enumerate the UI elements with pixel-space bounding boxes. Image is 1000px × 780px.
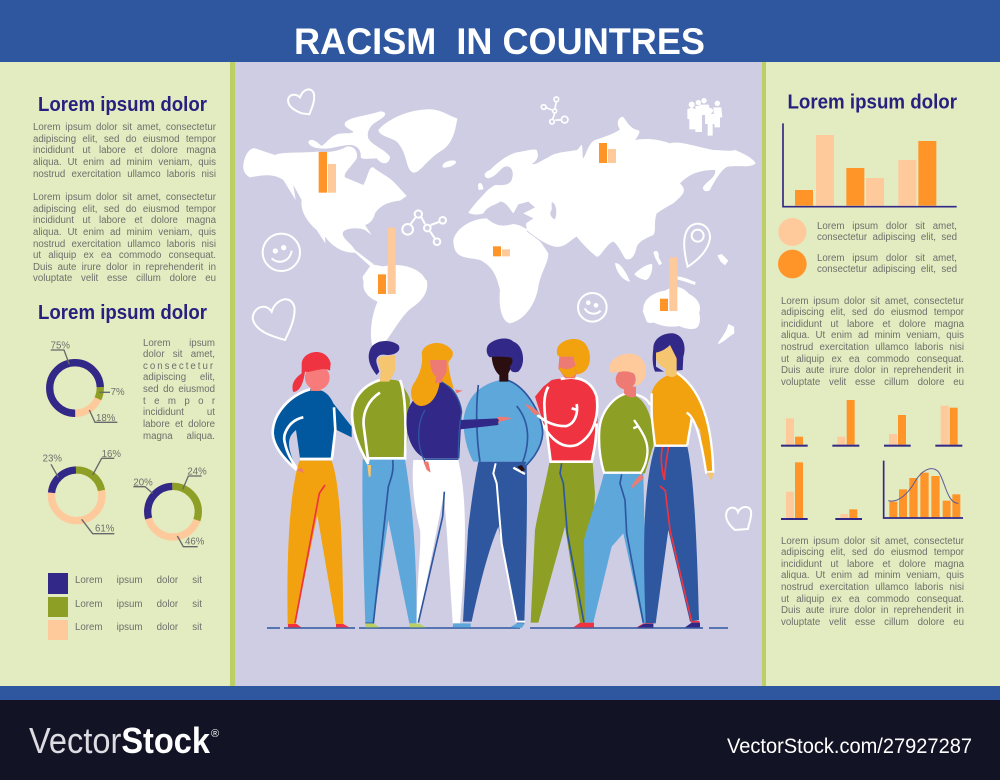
text block: right paragraph two [781,536,964,628]
icon: network top [541,97,568,124]
text block: beside donut: labore et dolore [143,419,215,430]
text block: right paragraph two: Lorem ipsum dolor sit amet, consectetur [781,536,964,546]
text block: left paragraph two: Duis aute irure dolor in reprehenderit in [33,262,216,273]
icon: smiley left [263,234,300,271]
bars: australia [660,257,677,311]
text block: left paragraph two: aliqua. Ut enim ad minim veniam, quis [33,227,216,238]
text block: right paragraph two: aliqua. Ut enim ad minim veniam, quis [781,570,964,581]
eurasia [468,117,756,259]
donut leader lines and percentages: 24% [187,466,207,477]
person four: blue sweater, dark skin [463,339,543,628]
text block: bar legend two: Lorem ipsum dolor sit amet, [817,252,957,264]
watermark footer [0,700,1000,780]
text block: right paragraph one: voluptate velit esse cillum dolore eu [781,377,964,388]
world map and decorative icons [243,89,756,348]
donut leader lines and percentages: 20% [133,477,153,488]
africa [453,218,548,323]
person three: blonde hair, navy top, white trousers [406,343,501,627]
text block: right paragraph one: incididunt ut labore et dolore magna [781,319,964,330]
heading: left top: Lorem ipsum dolor [38,93,207,116]
small bar charts [781,400,963,520]
text block: right paragraph one [781,296,964,388]
text block: left paragraph one: aliqua. Ut enim ad minim veniam, quis [33,157,216,168]
mini chart four [935,406,962,447]
text block: left paragraph two: voluptate velit esse cillum dolore eu [33,273,216,284]
text block: bar legend one: Lorem ipsum dolor sit amet, [817,220,957,232]
bars: south america [378,228,396,294]
bars: africa [493,246,510,256]
pacific islet [717,254,728,265]
person two: olive sweater, blue jeans [352,341,426,627]
text block: left paragraph two: incididunt ut labore et dolore magna [33,215,216,226]
registered mark: ® [211,728,219,740]
heading: left second: Lorem ipsum dolor [38,301,207,324]
text block: right paragraph two: incididunt ut labore et dolore magna [781,559,964,570]
panel: left sidebar [0,62,235,686]
donut leader lines and percentages: 23% [43,454,62,465]
donut leader lines and percentages: 75% [51,340,70,351]
borneo [634,264,652,280]
text block: right paragraph one: Duis aute irure dolor in reprehenderit in [781,365,964,376]
panel: right sidebar [762,62,1000,686]
donut charts [43,340,207,548]
legend [48,573,202,640]
text block: right paragraph one: ut aliquip ex ea commodo consequat. [781,354,964,365]
person five: raised arm [525,404,577,426]
mini chart two [832,400,859,447]
uk [478,183,483,190]
text block: left paragraph one: incididunt ut labore et dolore magna [33,145,216,156]
legend swatch olive [48,597,68,617]
sumatra [615,263,630,282]
bars: north america [319,152,336,193]
text block: left paragraph one [33,122,216,180]
text block: left paragraph one: adipiscing elit, sed do eiusmod tempor [33,134,216,145]
text block: right paragraph two: ut aliquip ex ea commodo consequat. [781,594,964,605]
heading: right: Lorem ipsum dolor [788,90,957,114]
text block: beside donut [143,338,224,442]
donut leader lines and percentages: 16% [102,449,121,460]
text block: bar legend two: consectetur adipiscing elit, sed [817,264,957,275]
text block: beside donut: sed do eiusmod [143,384,215,395]
ground line [267,627,728,629]
text block: right paragraph two: voluptate velit esse cillum dolore eu [781,617,964,628]
mini chart five [781,462,808,520]
new zealand [718,324,734,344]
legend swatch navy [48,573,68,594]
hand of person three on person four [463,417,512,428]
mini chart three [884,415,911,447]
footer image id: VectorStock.com/27927287 [727,735,972,758]
south america [363,264,427,348]
australia [643,287,700,329]
text block: right paragraph two: Duis aute irure dolor in reprehenderit in [781,605,964,616]
text block: right paragraph two: adipiscing elit, sed do eiusmod tempor [781,547,964,558]
text block: right paragraph one: Lorem ipsum dolor sit amet, consectetur [781,296,964,306]
north america [243,146,407,267]
text block: left paragraph two: ut aliquip ex ea commodo consequat. [33,250,216,261]
text block: left paragraph one: nostrud exercitation ullamco laboris nisi [33,169,216,180]
donut leader lines and percentages: 18% [96,413,116,424]
legend dot orange [778,250,807,278]
map continents [243,109,756,348]
person one: red hair, blue sweater [273,352,352,627]
icon: heart lower [253,299,295,340]
text block: beside donut: consectetur [143,361,215,372]
legend label navy: Lorem ipsum dolor sit [75,575,202,586]
legend label peach: Lorem ipsum dolor sit [75,622,202,632]
icon: group of people [687,98,722,136]
text block: beside donut: tempor [143,396,224,407]
text block: bar legend one [817,220,957,243]
text block: beside donut: adipiscing elit, [143,372,215,383]
legend label olive: Lorem ipsum dolor sit [75,598,202,610]
text block: left paragraph two [33,192,216,284]
text block: beside donut: incididunt ut [143,407,215,418]
text block: right paragraph two: nostrud exercitation ullamco laboris nisi [781,582,964,593]
header band [0,0,1000,62]
person six: peach hair, olive sweater [584,354,655,627]
text block: left paragraph two: Lorem ipsum dolor sit amet, consectetur [33,192,216,203]
panel: centre map and people [235,62,762,686]
bars: russia [599,143,616,163]
donut leader lines and percentages: 7% [111,387,125,398]
philippines [653,251,662,265]
donut one [50,363,100,413]
caspian sea cutout [550,202,556,219]
histogram with curve [884,461,963,518]
text block: left paragraph one: Lorem ipsum dolor sit amet, consectetur [33,122,216,133]
text block: right paragraph one: adipiscing elit, sed do eiusmod tempor [781,307,964,318]
footer logo: VectorStock [29,720,211,761]
red sea line [527,231,546,245]
legend dot peach [778,218,806,246]
text block: beside donut: Lorem ipsum [143,338,215,348]
greenland [378,109,457,173]
people group [267,333,728,628]
title: RACISM IN COUNTRES [294,21,705,62]
bottom blue band [0,686,1000,700]
icon: location pin [684,224,710,267]
canadian arctic islands [308,111,390,163]
legend swatch peach [48,620,68,640]
text block: bar legend one: consectetur adipiscing elit, sed [817,232,957,243]
icon: heart top [288,89,314,114]
text block: beside donut: magna aliqua. [143,431,215,442]
donut leader lines and percentages: 61% [95,524,115,535]
person seven: orange sweater, navy trousers [637,333,713,627]
text block: bar legend two [817,252,957,275]
text block: left paragraph two: nostrud exercitation ullamco laboris nisi [33,239,216,250]
text block: beside donut: dolor sit amet, [143,349,215,360]
new guinea [677,277,696,285]
text block: right paragraph one: nostrud exercitation ullamco laboris nisi [781,342,964,353]
icon: network middle [402,210,446,245]
person five: red sweater, olive trousers [531,339,598,627]
donut leader lines and percentages [43,340,207,548]
mini chart one [781,418,808,447]
donut leader lines and percentages: 46% [185,537,205,548]
mini chart six [835,509,862,520]
icon: heart small right [726,507,751,530]
text block: right paragraph one: aliqua. Ut enim ad minim veniam, quis [781,330,964,341]
iceland [443,160,456,168]
donut two [51,470,102,521]
bar chart: main [778,123,957,278]
text block: left paragraph two: adipiscing elit, sed do eiusmod tempor [33,204,216,215]
donut three [148,486,198,537]
icon: smiley lower [578,293,607,322]
